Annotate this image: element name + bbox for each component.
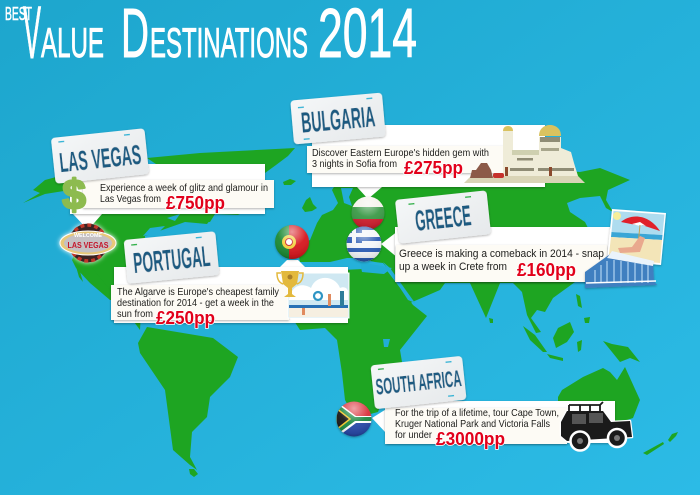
- title: ALUE: [41, 19, 104, 66]
- panel: Portugal: [111, 231, 349, 328]
- price: £750pp: [166, 193, 225, 213]
- number plate: Greece: [395, 190, 491, 244]
- number plate: South Africa: [370, 356, 467, 409]
- price: £160pp: [517, 260, 576, 280]
- flag: Bulgaria: [351, 196, 386, 231]
- illustration: Parthenon: [585, 251, 657, 288]
- description: sun from: [117, 309, 153, 320]
- icon: Las Vegas sign: LAS VEGAS: [68, 240, 109, 250]
- callout pointer: [357, 187, 382, 199]
- panel background: [395, 227, 610, 282]
- description: Kruger National Park and Victoria Falls: [395, 419, 550, 430]
- number plate: Greece: GREECE: [414, 200, 473, 238]
- seas and lakes: [143, 188, 415, 347]
- world map: [23, 148, 678, 477]
- title: BEST: [5, 4, 32, 24]
- number plate: Portugal: [124, 231, 219, 284]
- price: £250pp: [156, 308, 215, 328]
- description: Discover Eastern Europe's hidden gem with: [312, 148, 489, 159]
- title: ESTINATIONS: [150, 19, 308, 66]
- description: The Algarve is Europe's cheapest family: [117, 287, 280, 298]
- description: up a week in Crete from: [399, 261, 507, 273]
- number plate: South Africa: SOUTH AFRICA: [374, 365, 463, 400]
- panel background: [387, 401, 615, 443]
- flag: South Africa: [336, 401, 373, 438]
- title: [5, 0, 417, 74]
- callout pointer: [73, 214, 102, 230]
- text card: [385, 408, 567, 444]
- description: For the trip of a lifetime, tour Cape Town,: [395, 408, 559, 419]
- panel: Las Vegas: [51, 128, 274, 230]
- icon: Las Vegas sign: WELCOME: [74, 233, 103, 239]
- number plate: Bulgaria: [290, 93, 386, 144]
- description: destination for 2014 - get a week in the: [117, 298, 274, 309]
- photo: beach holiday: [607, 209, 666, 265]
- panel: Greece: [381, 190, 666, 288]
- description: 3 nights in Sofia from: [312, 159, 397, 170]
- illustration: Alexander Nevsky cathedral: [464, 125, 585, 183]
- callout pointer: [279, 260, 306, 268]
- description: Greece is making a comeback in 2014 - snap: [399, 248, 604, 260]
- photo: family on beach: [288, 273, 349, 318]
- flag: Greece: [346, 226, 383, 263]
- callout pointer: [372, 408, 388, 433]
- text card: [111, 285, 289, 320]
- panel: South Africa: [370, 356, 632, 450]
- number plate: Las Vegas: LAS VEGAS: [58, 139, 143, 178]
- panel background: [70, 164, 265, 214]
- number plate: Portugal: PORTUGAL: [132, 241, 212, 280]
- number plate: Bulgaria: BULGARIA: [300, 101, 376, 140]
- description: Experience a week of glitz and glamour in: [100, 183, 268, 194]
- price: £3000pp: [436, 429, 505, 449]
- text card: [396, 245, 607, 282]
- illustration: safari jeep: [561, 402, 632, 450]
- flag: Portugal: [275, 225, 309, 259]
- panel background: [114, 267, 348, 323]
- text card: [83, 180, 274, 208]
- icon: trophy: [277, 271, 303, 297]
- description: for under: [395, 430, 433, 441]
- price: £275pp: [404, 158, 463, 178]
- number plate: Las Vegas: [51, 128, 149, 184]
- description: Las Vegas from: [100, 194, 161, 205]
- panel background: [312, 125, 545, 187]
- icon: dollar sign: $: [62, 171, 86, 218]
- text card: [307, 146, 510, 173]
- icon: Las Vegas sign: [60, 224, 116, 262]
- callout pointer: [381, 231, 398, 258]
- panel: Bulgaria: [290, 93, 585, 199]
